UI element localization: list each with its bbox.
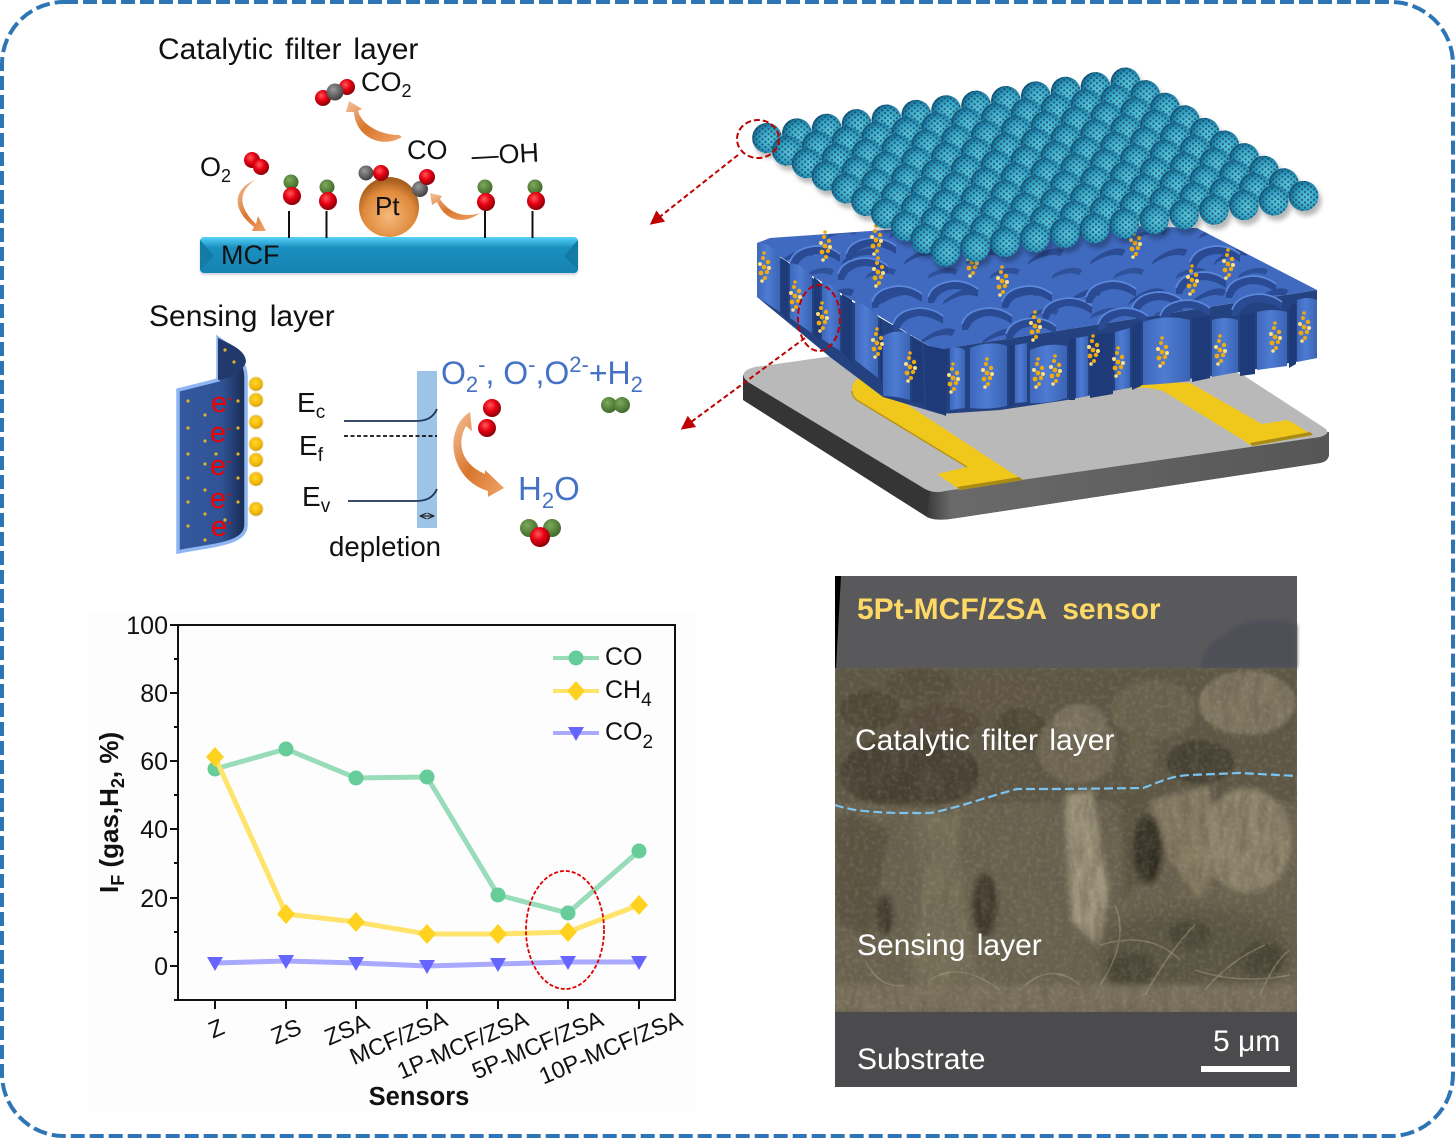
- callout: sphere highlight: [652, 120, 779, 223]
- MCF bar: MCF: [221, 240, 279, 270]
- front wall sheets: [757, 243, 1317, 410]
- y tick labels: 100: [126, 612, 168, 640]
- x tick labels: 5P-MCF/ZSA: [468, 1006, 607, 1084]
- y tick labels: 40: [140, 816, 168, 844]
- panel: sensing layer: [149, 300, 643, 562]
- label: catalytic filter layer: Catalytic filter layer: [855, 724, 1114, 757]
- callout: 5P highlight: [526, 871, 604, 989]
- y tick labels: 20: [140, 885, 168, 913]
- sheet with electrons: -: [226, 420, 231, 437]
- label: reactive oxygen plus H2: 2: [631, 372, 643, 397]
- SEM title: 5Pt-MCF/ZSA sensor: [857, 593, 1161, 626]
- label: Ec: c: [316, 402, 325, 423]
- panel: 3D sensor device: [652, 68, 1329, 520]
- y axis title: 2: [108, 778, 128, 788]
- particle cluster: [1200, 620, 1297, 668]
- heading: catalytic filter layer: Catalytic filter layer: [158, 33, 418, 66]
- label: OH: —OH: [471, 138, 540, 171]
- catalytic particles: [835, 667, 1297, 810]
- x tick labels: ZSA: [321, 1009, 373, 1050]
- panel: SEM micrograph: [835, 576, 1297, 1087]
- depletion bar: [417, 371, 437, 528]
- label: Ev: v: [321, 496, 331, 517]
- label: H2O: H: [518, 470, 542, 507]
- label: reactive oxygen plus H2: +H: [589, 355, 631, 391]
- label: substrate: Substrate: [857, 1043, 985, 1076]
- sheet with electrons: -: [226, 486, 231, 503]
- label: CO2: CO: [361, 67, 402, 97]
- electrode: left: [852, 370, 1023, 490]
- y axis title: I: [94, 886, 124, 893]
- label: H2O: O: [554, 470, 580, 507]
- molecules: O2 and H2: [478, 397, 630, 437]
- sheet with electrons: [178, 338, 246, 552]
- sheet with electrons: -: [226, 453, 231, 470]
- panel: catalytic filter layer: [158, 33, 578, 275]
- heading: sensing layer: Sensing layer: [149, 300, 335, 333]
- label: H2O: 2: [542, 488, 554, 513]
- label: reactive oxygen plus H2: ,O: [535, 355, 569, 391]
- label: O2: 2: [221, 166, 231, 186]
- arrow: OH to CO: [430, 193, 480, 220]
- legend: CO: [605, 643, 642, 671]
- label: Ef: f: [318, 445, 324, 466]
- label: reactive oxygen plus H2: , O: [485, 355, 528, 391]
- label: CO2: 2: [402, 81, 412, 101]
- sheet with electrons: e: [210, 417, 226, 449]
- legend: CH: [605, 676, 641, 704]
- y axis title: F: [108, 875, 128, 886]
- brown film: [835, 668, 1297, 1012]
- bottom substrate band: [835, 1012, 1297, 1087]
- series: CO: [208, 742, 646, 920]
- sheet with electrons: e: [210, 450, 226, 482]
- label: O2: O: [200, 152, 221, 182]
- band diagram: [344, 409, 437, 516]
- x tick labels: ZS: [267, 1014, 305, 1049]
- hydroxyl groups: [283, 174, 545, 238]
- MCF bar: [200, 237, 578, 275]
- sensing layer block: [757, 222, 1317, 416]
- series: CO2: [207, 955, 647, 974]
- x tick labels: 10P-MCF/ZSA: [535, 1006, 686, 1089]
- layer boundary: [835, 773, 1297, 813]
- y tick labels: 60: [140, 748, 168, 776]
- catalyst clusters: [758, 224, 1311, 394]
- top gray background: [835, 576, 1297, 669]
- electrode: right: [1092, 381, 1313, 446]
- label: reactive oxygen plus H2: 2: [466, 372, 478, 397]
- y tick labels: 80: [140, 680, 168, 708]
- gold nanoparticles: [249, 377, 263, 516]
- arrow: O2 adsorption: [238, 180, 266, 231]
- label: Ec: E: [297, 387, 316, 418]
- molecule: H2O: [520, 519, 561, 547]
- label: reactive oxygen plus H2: 2-: [569, 352, 589, 377]
- sheet with electrons: e: [211, 511, 227, 543]
- sheet with electrons: -: [227, 390, 232, 407]
- Pt particle: Pt: [375, 191, 400, 221]
- legend: CO: [605, 718, 642, 746]
- legend: 4: [641, 690, 652, 711]
- y axis title: , %): [94, 732, 124, 778]
- sensing flakes: [835, 785, 1297, 1012]
- y tick labels: 0: [154, 953, 168, 981]
- CO2 molecule: [315, 79, 355, 106]
- scale bar: [1201, 1025, 1290, 1072]
- edge sliver: [835, 576, 841, 669]
- top surface curls: [790, 238, 1282, 340]
- CO molecules: [358, 165, 435, 197]
- legend: 2: [642, 732, 653, 753]
- panel: line chart: [88, 610, 695, 1112]
- film structures: [835, 668, 1296, 1012]
- label: reactive oxygen plus H2: O: [441, 355, 466, 391]
- y axis title: (gas,H: [94, 788, 124, 875]
- arrow: CO to CO2: [346, 101, 402, 142]
- label: Ev: E: [302, 481, 321, 512]
- callout: sheet highlight: [683, 285, 840, 428]
- spheres: catalytic filter layer: [752, 68, 1318, 266]
- x tick labels: [205, 1006, 686, 1089]
- label: reactive oxygen plus H2: -: [478, 352, 485, 377]
- scale bar: 5 μm: [1213, 1025, 1280, 1058]
- arrow: oxygen to water: [453, 412, 504, 497]
- x tick labels: MCF/ZSA: [346, 1006, 451, 1070]
- label: Ef: E: [299, 430, 318, 461]
- axes: [170, 625, 675, 1009]
- y tick labels: [126, 612, 168, 981]
- sheet with electrons: -: [227, 514, 232, 531]
- Pt particle: [359, 177, 419, 237]
- label: depletion: depletion: [329, 531, 441, 562]
- label: CO: CO: [407, 135, 448, 165]
- series: CH4: [206, 747, 648, 944]
- O2 molecule: [244, 152, 269, 175]
- x tick labels: 1P-MCF/ZSA: [393, 1006, 532, 1084]
- label: reactive oxygen plus H2: -: [528, 352, 535, 377]
- sheet with electrons: e: [210, 483, 226, 515]
- label: sensing layer: Sensing layer: [857, 929, 1042, 962]
- x axis title: Sensors: [369, 1083, 469, 1111]
- substrate plate: [743, 330, 1329, 520]
- sheet threads: [865, 905, 1290, 995]
- dark wall fins: [781, 258, 1296, 416]
- sheet with electrons: e: [211, 387, 227, 419]
- texture overlays: [835, 668, 1297, 1012]
- legend: [553, 643, 653, 753]
- x tick labels: Z: [205, 1014, 228, 1043]
